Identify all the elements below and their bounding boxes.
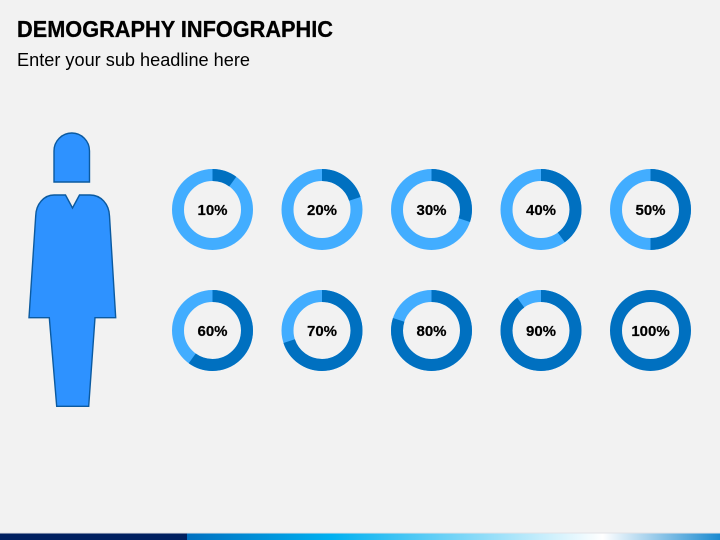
donut: 70%	[288, 296, 356, 365]
donut: 50%	[616, 175, 685, 244]
donut: 100%: 100%	[631, 323, 670, 340]
donut: 20%: 20%	[307, 202, 337, 219]
donut: 10%: 10%	[197, 202, 228, 219]
title: DEMOGRAPHY INFOGRAPHIC	[17, 16, 333, 42]
donut: 20%	[288, 175, 356, 244]
person head	[54, 133, 90, 182]
donut: 60%	[178, 296, 247, 365]
donut: 80%	[397, 296, 466, 365]
icon: person	[29, 133, 116, 406]
donut: 80%: 80%	[416, 323, 447, 340]
donut: 90%: 90%	[526, 323, 556, 340]
donut: 90%	[506, 296, 576, 365]
donut: 30%: 30%	[416, 202, 447, 219]
donut: 30%	[397, 175, 466, 244]
donut: 40%	[506, 175, 576, 244]
person body	[29, 195, 116, 406]
donut: 100%	[616, 296, 685, 365]
footer bar	[0, 532, 720, 540]
donut: 10%	[178, 175, 247, 244]
donut: 40%: 40%	[526, 202, 556, 219]
donut: 60%: 60%	[197, 323, 228, 340]
subtitle: Enter your sub headline here	[17, 50, 250, 70]
donut: 70%: 70%	[307, 323, 337, 340]
donut: 50%: 50%	[635, 202, 666, 219]
